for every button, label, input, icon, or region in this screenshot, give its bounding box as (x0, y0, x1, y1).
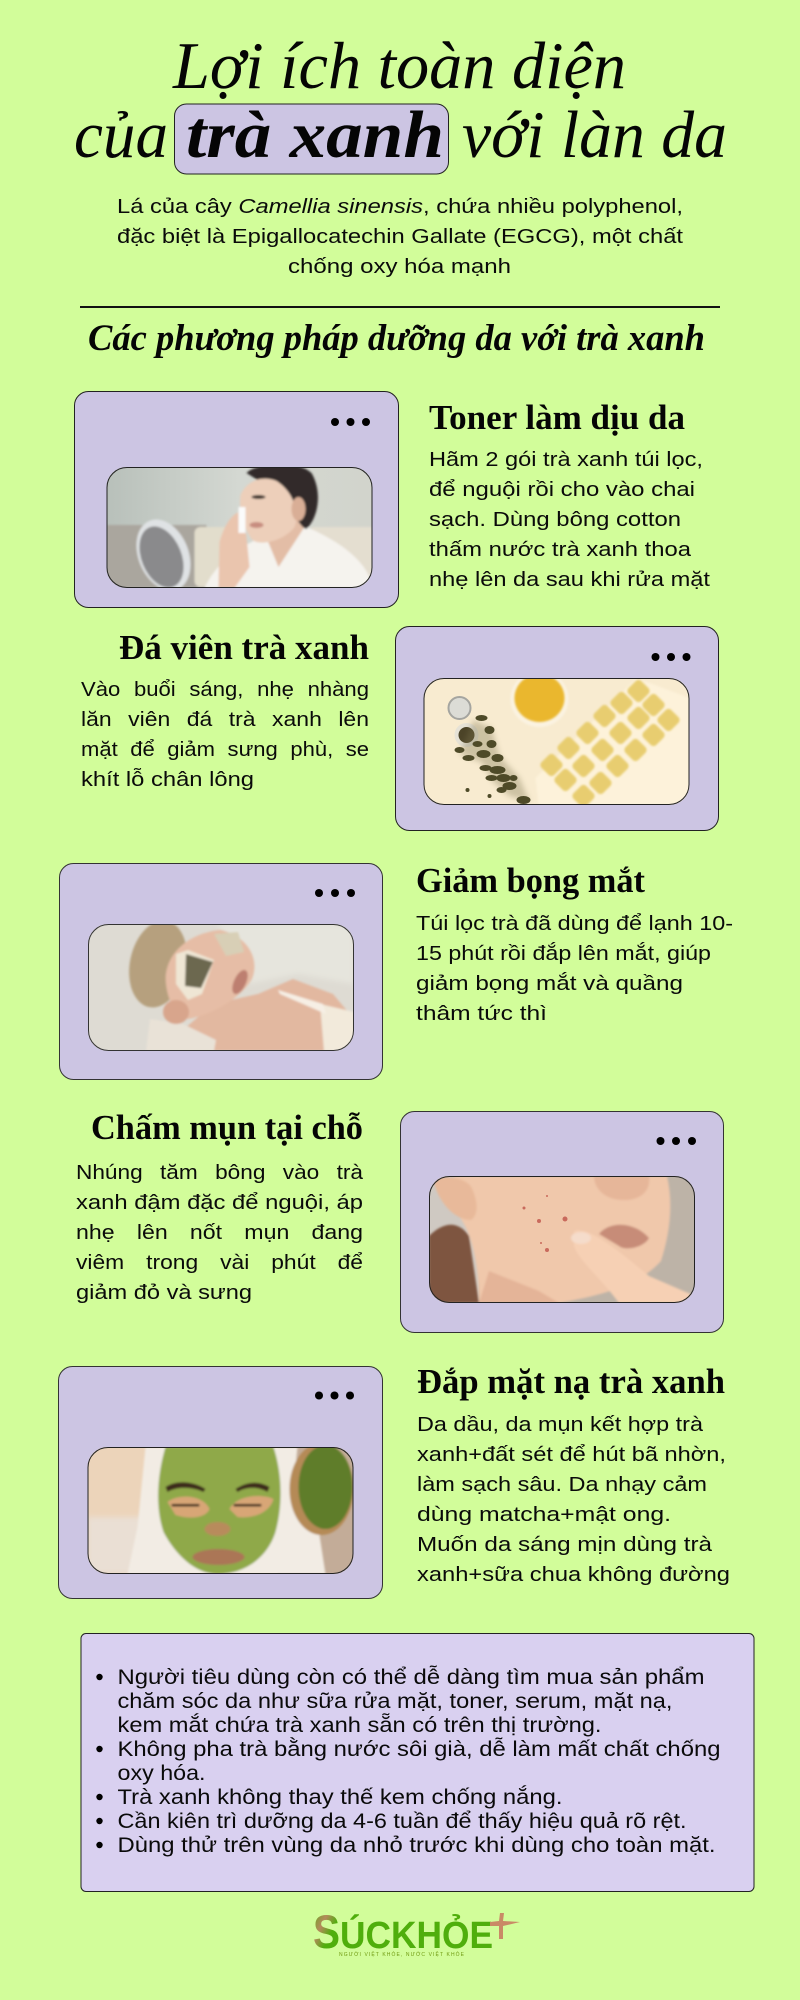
tip: sunscreen: Trà xanh không thay thế kem chống nắng. (118, 1786, 562, 1809)
tip: water (96, 1738, 721, 1785)
panel: toner card (74, 392, 398, 608)
text: toner (429, 448, 710, 591)
highlight pill (174, 104, 448, 174)
text: toner: thấm nước trà xanh thoa (429, 538, 692, 561)
tip: water: oxy hóa. (118, 1762, 206, 1785)
text: acne: xanh đậm đặc để nguội, áp (76, 1191, 363, 1214)
tip: patch test: Dùng thử trên vùng da nhỏ trước khi dùng cho toàn mặt. (118, 1834, 716, 1857)
photo: ice tray and tea (424, 671, 690, 809)
panel: eye card (60, 864, 382, 1080)
text: toner: để nguội rồi cho vào chai (429, 478, 695, 501)
heading: mask: Đắp mặt nạ trà xanh (417, 1362, 725, 1401)
section heading: Các phương pháp dưỡng da với trà xanh (88, 318, 705, 359)
text: mask (417, 1413, 730, 1586)
photo: tea bags on eyes (88, 915, 354, 1051)
logo: NGƯỜI VIỆT KHỎE, NƯỚC VIỆT KHỎE (339, 1950, 465, 1958)
text: acne (76, 1161, 364, 1304)
text: mask: xanh+đất sét để hút bã nhờn, (417, 1443, 726, 1466)
photo: acne on cheek (429, 1176, 695, 1303)
panel: mask card (58, 1366, 382, 1598)
text: ice: Vào buổi sáng, nhẹ nhàng (81, 678, 369, 701)
title (74, 29, 727, 174)
text: eyes: 15 phút rồi đắp lên mắt, giúp (416, 942, 711, 965)
photo: green tea mask (88, 1443, 354, 1574)
title: trà xanh (186, 98, 444, 172)
icon: plus (490, 1913, 520, 1939)
text: acne: giảm đỏ và sưng (76, 1281, 252, 1304)
text: eyes: thâm tức thì (416, 1002, 547, 1025)
text: eyes: giảm bọng mắt và quầng (416, 972, 683, 995)
text: mask: làm sạch sâu. Da nhạy cảm (417, 1473, 707, 1496)
text: toner: sạch. Dùng bông cotton (429, 508, 681, 531)
title: của (74, 98, 168, 172)
dots menu (331, 418, 370, 426)
logo: S (313, 1905, 340, 1958)
text: eyes (416, 912, 733, 1025)
title: Lợi ích toàn diện (172, 29, 626, 103)
intro paragraph: chống oxy hóa mạnh (288, 255, 511, 278)
heading: ice: Đá viên trà xanh (119, 628, 369, 667)
tip: water: Không pha trà bằng nước sôi già, dễ làm mất chất chống (118, 1738, 720, 1761)
text: ice (81, 678, 369, 791)
panel: tips box (81, 1634, 754, 1892)
heading: Toner: Toner làm dịu da (429, 398, 685, 437)
panel: acne card (400, 1112, 724, 1332)
intro paragraph: đặc biệt là Epigallocatechin Gallate (EGCG), một chất (117, 225, 683, 248)
intro paragraph (117, 195, 683, 278)
dots menu (652, 653, 690, 661)
dots menu (315, 1392, 354, 1400)
text: mask: Muốn da sáng mịn dùng trà (417, 1533, 713, 1556)
text: mask: dùng matcha+mật ong. (417, 1503, 671, 1526)
heading: eyes: Giảm bọng mắt (416, 861, 645, 900)
logo (313, 1905, 520, 1958)
text: toner: nhẹ lên da sau khi rửa mặt (429, 568, 710, 591)
text: toner: Hãm 2 gói trà xanh túi lọc, (429, 448, 703, 471)
text: acne: viêm trong vài phút để (76, 1251, 363, 1274)
text: mask: xanh+sữa chua không đường (417, 1563, 730, 1586)
text: ice: lăn viên đá trà xanh lên (81, 708, 369, 731)
tip: patience: Cần kiên trì dưỡng da 4-6 tuần để thấy hiệu quả rõ rệt. (118, 1810, 686, 1833)
tip: products (96, 1666, 705, 1737)
text: acne: nhẹ lên nốt mụn đang (76, 1221, 363, 1244)
tip: products: kem mắt chứa trà xanh sẵn có trên thị trường. (118, 1714, 602, 1737)
text: mask: Da dầu, da mụn kết hợp trà (417, 1413, 704, 1436)
text: eyes: Túi lọc trà đã dùng để lạnh 10- (416, 912, 733, 935)
intro paragraph: Lá của cây Camellia sinensis , chứa nhiều polyphenol, (117, 195, 683, 218)
title: với làn da (462, 98, 727, 172)
text: acne: Nhúng tăm bông vào trà (76, 1161, 364, 1184)
dots menu (315, 889, 355, 897)
logo: ÚCKHỎE (340, 1913, 493, 1957)
tip: products: chăm sóc da như sữa rửa mặt, toner, serum, mặt nạ, (118, 1690, 672, 1713)
tip: products: Người tiêu dùng còn có thể dễ dàng tìm mua sản phẩm (118, 1666, 704, 1689)
panel: ice card (396, 626, 718, 830)
photo: woman applying cotton pad (106, 467, 372, 588)
heading: acne: Chấm mụn tại chỗ (91, 1108, 363, 1147)
text: ice: mặt để giảm sưng phù, se (81, 738, 369, 761)
text: ice: khít lỗ chân lông (81, 768, 254, 791)
dots menu (656, 1137, 696, 1145)
